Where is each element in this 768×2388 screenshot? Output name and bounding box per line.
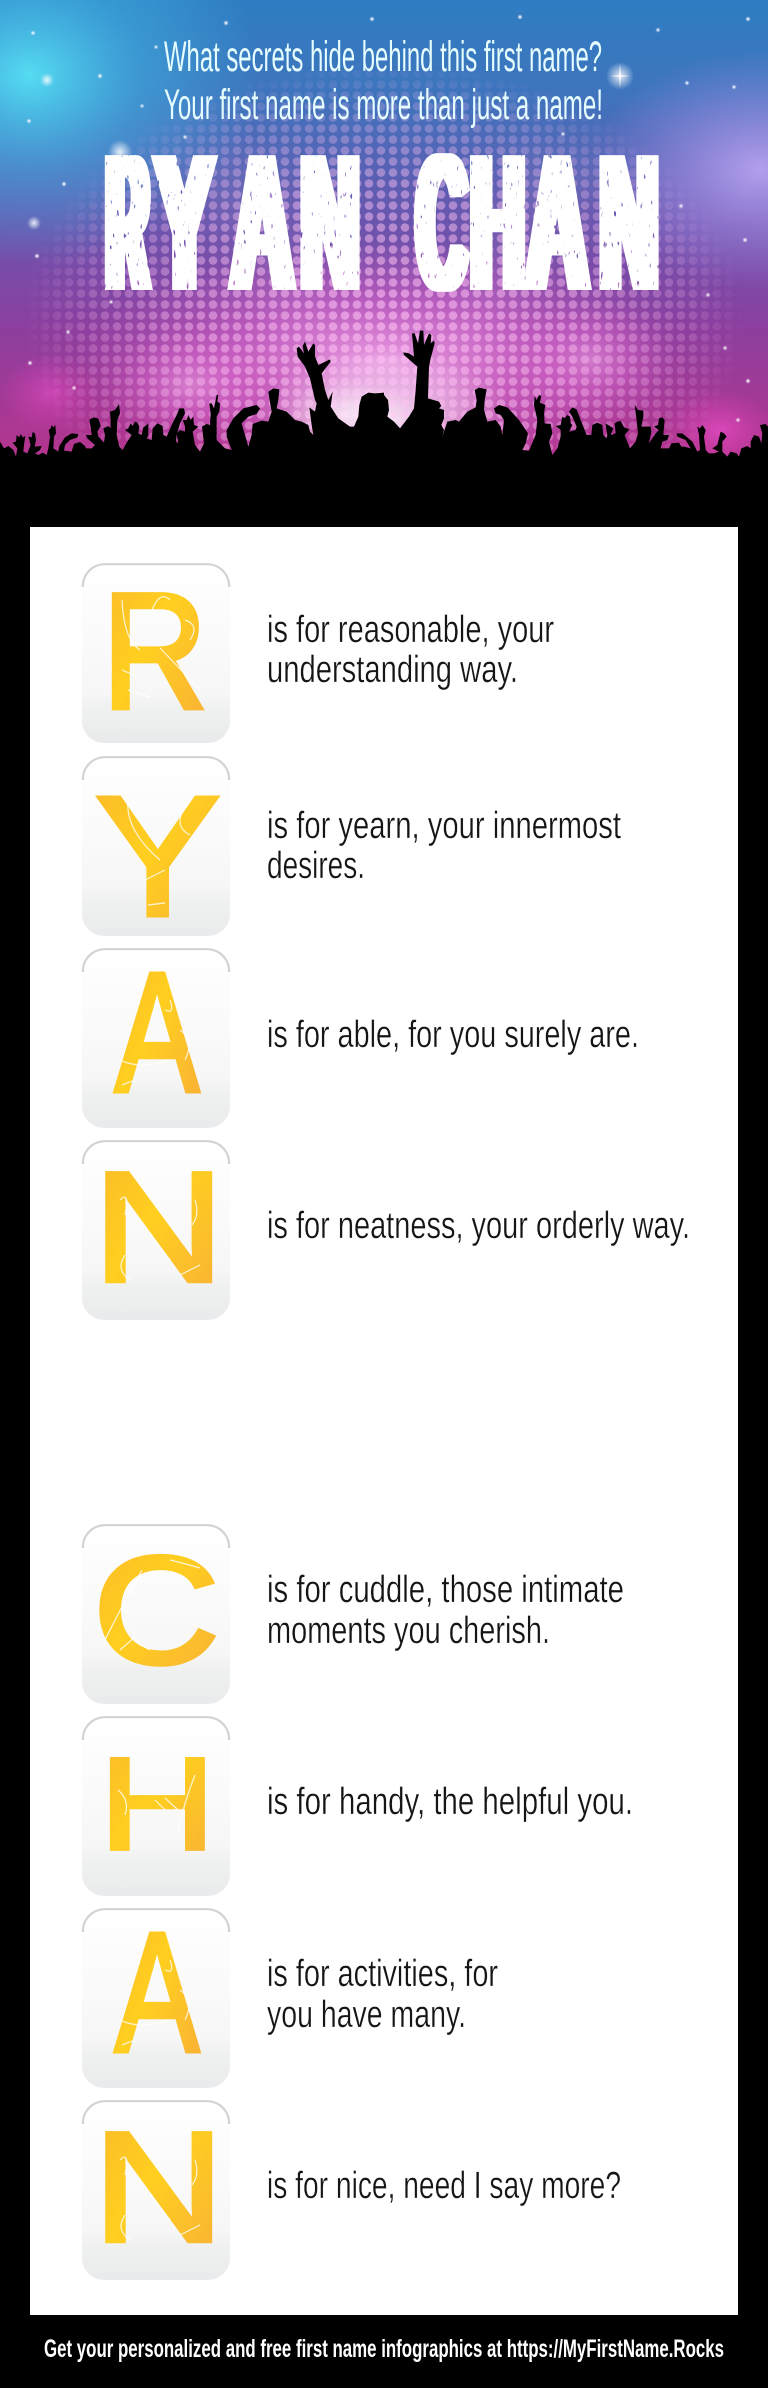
- crowd silhouette: [0, 331, 768, 527]
- tile: letter A: [82, 938, 230, 1128]
- right crowd: [384, 331, 768, 483]
- text line C: [267, 1569, 624, 1652]
- sparkling stars: [27, 15, 750, 422]
- tile: letter A: A: [115, 1898, 199, 2087]
- text line C: moments you cherish.: [267, 1610, 550, 1652]
- tile: letter H: H: [99, 1731, 216, 1877]
- white content panel: [30, 527, 738, 2315]
- left crowd: [0, 342, 384, 483]
- row: N: [82, 1139, 690, 1320]
- tile: letter N: N: [93, 2099, 224, 2274]
- tile: letter C: C: [93, 1524, 219, 1696]
- text line Y: [267, 805, 621, 887]
- tile: letter A: A: [115, 938, 199, 1127]
- text line R: understanding way.: [267, 649, 518, 691]
- text line R: [267, 609, 554, 691]
- tile: letter Y: Y: [96, 761, 220, 951]
- subtitle: [164, 33, 603, 129]
- text line A: is for able, for you surely are.: [267, 1014, 639, 1056]
- text line C: is for cuddle, those intimate: [267, 1569, 624, 1611]
- text line Y: is for yearn, your innermost: [267, 805, 621, 847]
- tile: letter R: R: [102, 560, 208, 744]
- title: name: N: [600, 112, 658, 332]
- row: A: [82, 938, 639, 1128]
- text line R: is for reasonable, your: [267, 609, 554, 651]
- text line A: is for activities, for: [267, 1953, 498, 1995]
- text line A: you have many.: [267, 1994, 466, 2036]
- title: name: [107, 112, 658, 333]
- text line A: [267, 1953, 498, 2036]
- title: name: A: [231, 114, 293, 333]
- header background: stage lights: [0, 0, 768, 457]
- tile: letter N: N: [93, 1139, 224, 1314]
- text line Y: desires.: [267, 845, 365, 887]
- text line H: is for handy, the helpful you.: [267, 1781, 633, 1823]
- row: A: [82, 1898, 498, 2088]
- title: name: Y: [155, 113, 214, 333]
- title: name: H: [471, 114, 524, 332]
- row: R: [82, 560, 554, 744]
- title: name: R: [107, 112, 148, 332]
- text line N: is for nice, need I say more?: [267, 2165, 621, 2207]
- row: H: [82, 1716, 633, 1896]
- row: Y: [82, 756, 621, 951]
- title: name: A: [526, 114, 588, 333]
- row: N: [82, 2099, 621, 2280]
- tile: letter A: [82, 1898, 230, 2088]
- title: name: N: [301, 112, 359, 332]
- tile: letter H: [82, 1716, 230, 1896]
- row: C: [82, 1524, 624, 1704]
- title: name: C: [417, 114, 467, 333]
